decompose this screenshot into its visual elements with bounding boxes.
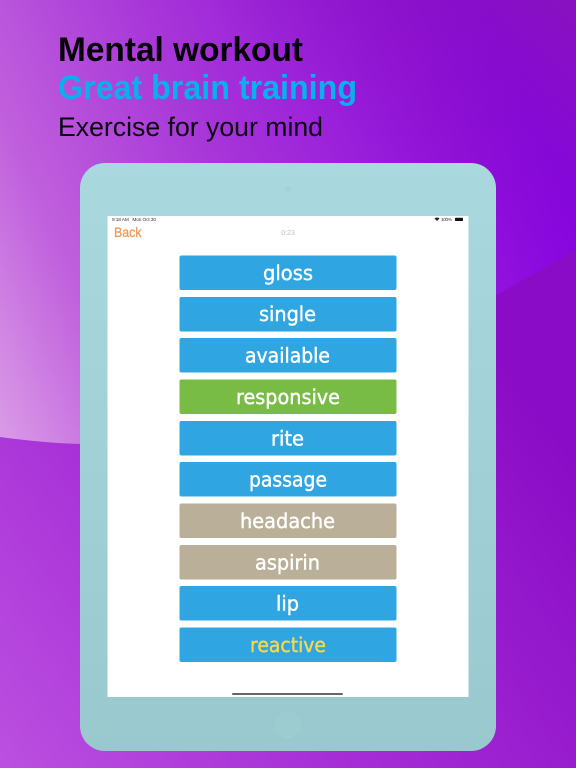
word button: passage [180,462,396,496]
subtitle: Exercise for your mind: Exercise for your mind [58,112,323,142]
timer: 0:23 [281,230,295,237]
title: Mental workout: Mental workout [58,31,303,69]
word button: rite: rite [271,426,304,450]
word button: available: available [245,344,330,368]
tablet body [80,163,496,751]
status bar battery: 100% [441,217,453,223]
word button: lip: lip [276,592,299,616]
heading: Great brain training: Great brain training [58,69,357,107]
status bar battery [434,217,463,223]
word button: responsive (correct) [180,380,396,414]
home indicator [232,693,343,695]
word button: rite [180,421,396,456]
back link: Back [114,224,142,240]
word button: reactive (highlighted) [180,628,396,662]
word button: headache [180,504,396,538]
word button: lip [180,586,396,620]
home button [276,713,300,737]
word button: available [180,338,396,372]
word button: gloss: gloss [263,261,313,285]
word button: headache: headache [240,509,335,533]
word button: passage: passage [249,468,327,492]
screen [108,216,468,697]
word button: aspirin: aspirin [255,550,320,574]
word button: single [180,297,396,332]
status bar time: 9:18 AM Mon Oct 30 [112,217,156,223]
word button: reactive (highlighted): reactive [250,633,326,657]
word button: single: single [259,302,316,326]
tablet device [80,163,496,751]
word button: responsive (correct): responsive [236,385,340,409]
word button: aspirin [180,545,396,580]
front camera [285,186,291,192]
word button: gloss [180,256,396,290]
